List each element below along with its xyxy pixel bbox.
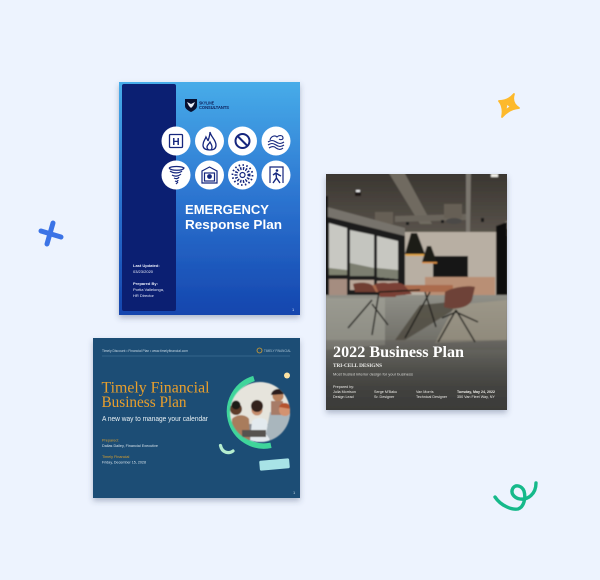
team and date details bbox=[333, 385, 495, 399]
sidebar details: 03/23/2020 bbox=[133, 269, 154, 274]
tagline: Most trusted interior design for your business bbox=[333, 372, 413, 376]
logo: skyline consultants: CONSULTANTS bbox=[199, 105, 229, 110]
team and date details: Serge M'Baku bbox=[374, 390, 397, 394]
office photo bbox=[326, 174, 507, 410]
icon grid: eight emergency icons bbox=[162, 126, 290, 190]
cover title: Response Plan bbox=[185, 217, 282, 232]
icon: tornado bbox=[162, 160, 190, 190]
page number: 1 bbox=[293, 490, 296, 495]
team photo bbox=[230, 382, 291, 442]
icon: blue cross sparkle bbox=[41, 223, 61, 244]
team and date details: Technical Designer bbox=[416, 395, 448, 399]
header: Timely Discount • Financial Plan • www.timelyfinancial.com bbox=[102, 348, 188, 353]
icon: shelter house bbox=[195, 160, 224, 190]
page number: 1 bbox=[292, 307, 295, 312]
sidebar details bbox=[133, 263, 164, 298]
icon: fire bbox=[195, 126, 224, 156]
aqua rounded bar bbox=[259, 458, 290, 471]
sidebar details: Last Updated: bbox=[133, 263, 160, 268]
team and date details: Julia Morrison bbox=[333, 390, 356, 394]
mint arc bbox=[220, 446, 233, 453]
icon: green squiggle bbox=[495, 483, 536, 509]
presenter details: Prepared: bbox=[102, 438, 119, 442]
cover title: EMERGENCY bbox=[185, 202, 269, 217]
cover title: 2022 Business Plan bbox=[333, 344, 464, 361]
panel: timely financial business plan cover bbox=[93, 338, 300, 498]
panel: 2022 business plan cover bbox=[320, 170, 515, 415]
icon: yellow four-point star bbox=[499, 94, 519, 117]
team and date details: Tuesday, May 24, 2022 bbox=[457, 390, 495, 394]
team and date details: 350 Van Fleet Way, NY bbox=[457, 395, 495, 399]
header bbox=[102, 348, 291, 356]
icon: virus bbox=[228, 160, 257, 190]
icon: hospital: H bbox=[172, 137, 180, 148]
panel: emergency response plan cover bbox=[119, 82, 300, 315]
sidebar details: HR Director bbox=[133, 293, 155, 298]
sidebar details: Portia Vallelonga, bbox=[133, 287, 164, 292]
cream dot bbox=[284, 372, 290, 378]
sidebar details: Prepared By: bbox=[133, 281, 158, 286]
heading bbox=[102, 380, 210, 411]
team and date details: Sr. Designer bbox=[374, 395, 395, 399]
heading: Business Plan bbox=[102, 394, 186, 411]
company name: TRI-CELL DESIGNS bbox=[333, 363, 382, 369]
team and date details: Design Lead bbox=[333, 395, 354, 399]
logo: skyline consultants bbox=[185, 99, 229, 112]
heading: Timely Financial bbox=[102, 380, 210, 396]
team and date details: Prepared by: bbox=[333, 385, 354, 389]
icon: flood waves bbox=[262, 126, 290, 156]
header: TIMELY FINANCIAL bbox=[264, 349, 291, 353]
green arc bbox=[230, 378, 271, 446]
icon: no entry bbox=[228, 126, 257, 156]
cover title bbox=[185, 202, 282, 232]
team and date details: Van Morris bbox=[416, 390, 434, 394]
icon: emergency exit bbox=[262, 160, 290, 190]
logo: skyline consultants: SKYLINE bbox=[199, 100, 214, 106]
subtitle: A new way to manage your calendar bbox=[102, 416, 209, 423]
sidebar bbox=[122, 84, 176, 311]
presenter details: Timely Financial bbox=[102, 455, 129, 459]
presenter details: Friday, December 15, 2028 bbox=[102, 460, 146, 464]
presenter details: Dallas Dailey, Financial Executive bbox=[102, 444, 158, 448]
presenter details bbox=[102, 438, 158, 464]
